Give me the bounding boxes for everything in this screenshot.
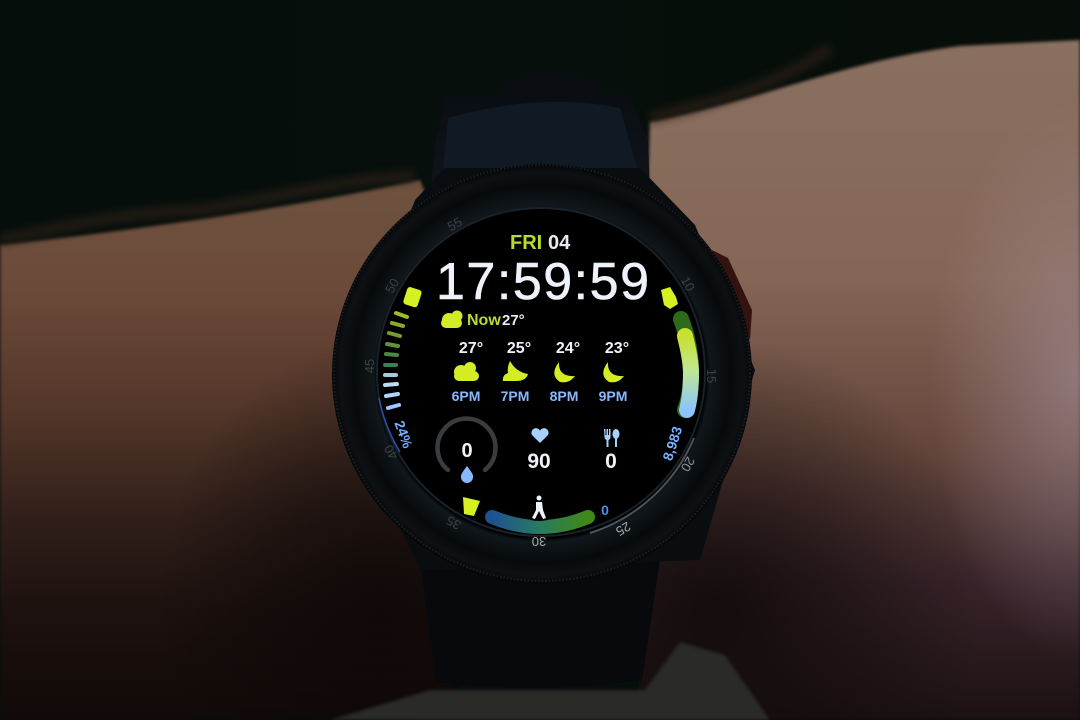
bezel numbers <box>362 214 719 549</box>
white sleeve at bottom <box>330 642 770 720</box>
right hand <box>640 40 1080 720</box>
activity notch <box>518 499 560 521</box>
steps count: 8,983 <box>659 424 685 463</box>
forecast temperatures <box>459 340 629 357</box>
bezel numbers: 10 <box>678 274 698 294</box>
current weather: Now <box>467 312 501 329</box>
activity progress arc <box>492 517 588 527</box>
time: 17:59:59 <box>436 253 649 311</box>
bezel numbers: 45 <box>362 359 377 373</box>
food tracker <box>604 429 620 473</box>
forecast hours <box>452 388 627 404</box>
hourly forecast <box>452 340 629 404</box>
forecast icons <box>454 361 624 382</box>
activity bar <box>463 496 609 527</box>
heart rate: 90 <box>527 450 551 473</box>
activity count: 0 <box>601 502 609 518</box>
icon: heart <box>531 428 549 443</box>
watch strap bottom <box>420 560 660 688</box>
forecast hours: 6PM <box>452 388 480 404</box>
icon: fork and spoon <box>604 429 620 447</box>
current weather <box>441 310 525 329</box>
steps track <box>681 319 691 410</box>
food tracker: 0 <box>605 450 617 473</box>
current weather: 27° <box>502 312 525 329</box>
water tracker <box>438 419 496 483</box>
water ring <box>438 419 496 470</box>
icon: shoe <box>661 287 678 309</box>
icon: battery <box>403 286 422 308</box>
icon: cup <box>463 497 480 516</box>
battery percent: 24% <box>391 418 416 451</box>
forecast temperatures: 24° <box>556 340 580 357</box>
bezel numbers: 55 <box>445 214 465 234</box>
date: 04 <box>548 232 571 254</box>
icon: cloud and moon <box>441 310 462 328</box>
date: FRI <box>510 232 542 254</box>
forecast hours: 8PM <box>550 388 578 404</box>
watch lugs and case <box>340 168 755 570</box>
bezel numbers: 15 <box>704 369 719 383</box>
bezel numbers: 50 <box>382 276 402 296</box>
date <box>510 232 571 254</box>
battery gauge <box>379 286 422 452</box>
water count: 0 <box>461 440 473 462</box>
bezel numbers: 40 <box>381 442 401 462</box>
heart rate <box>527 428 551 473</box>
forecast temperatures: 23° <box>605 340 629 357</box>
red side button <box>712 250 752 340</box>
battery ticks <box>385 313 407 408</box>
icon: water drop <box>461 466 473 483</box>
bezel numbers: 25 <box>613 519 633 539</box>
forecast temperatures: 27° <box>459 340 483 357</box>
left forearm <box>0 176 470 720</box>
watch bezel <box>332 164 752 584</box>
forecast hours: 9PM <box>599 388 627 404</box>
watch strap top <box>430 72 650 195</box>
forecast temperatures: 25° <box>507 340 531 357</box>
bezel numbers: 35 <box>444 513 464 533</box>
steps gauge <box>659 287 691 463</box>
steps progress bar <box>685 336 691 410</box>
bezel numbers: 30 <box>532 534 546 549</box>
forecast hours: 7PM <box>501 388 529 404</box>
icon: walking person <box>532 496 546 519</box>
bezel numbers: 20 <box>678 454 698 474</box>
